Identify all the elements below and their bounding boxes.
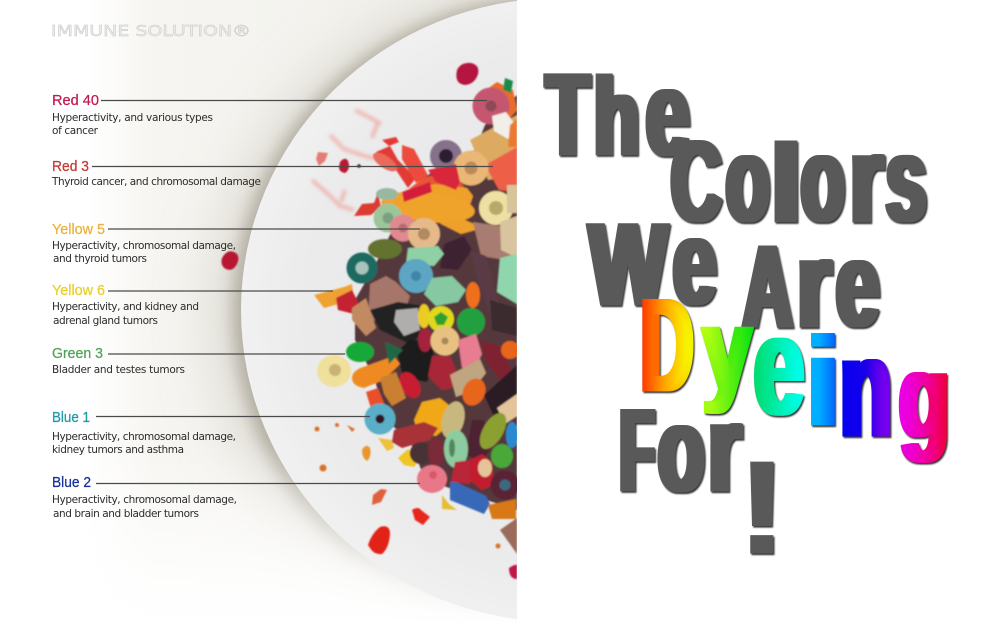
plate	[241, 0, 517, 619]
title word: The: T	[546, 49, 589, 181]
title word: The: h	[594, 55, 639, 179]
title word: For: F	[620, 385, 654, 517]
logo: Immune Solution: IMMUNE SOLUTION®	[51, 22, 251, 40]
title word: Colors: l	[770, 122, 802, 246]
callout: Yellow 5: Hyperactivity, chromosomal damage,	[52, 240, 236, 252]
title mark: exclamation: !	[743, 434, 781, 581]
title word: The: e	[646, 45, 689, 181]
callout: Blue 2	[52, 475, 420, 520]
callout: Green 3	[52, 346, 345, 376]
title word: Dyeing (rainbow): n	[840, 308, 892, 467]
callout: Red 40: of cancer	[52, 125, 99, 137]
callout: Red 3	[51, 159, 493, 188]
callout: Yellow 6: Hyperactivity, and kidney and	[52, 301, 199, 313]
title word: Colors: o	[726, 111, 769, 247]
title word: For	[620, 379, 741, 518]
callout: Red 3: Red 3	[52, 159, 89, 175]
title word: Dyeing (rainbow): g	[899, 329, 949, 463]
title word: We: W	[589, 199, 667, 331]
title word: Dyeing (rainbow): D	[641, 272, 693, 420]
callout: Yellow 6: Yellow 6	[52, 283, 105, 299]
title word: Are: A	[743, 221, 792, 353]
pink ring cereal	[479, 94, 503, 118]
dye splatters	[222, 63, 517, 579]
callout: Red 40: Hyperactivity, and various types	[52, 112, 213, 124]
title word: We: e	[673, 194, 716, 330]
title word: The	[546, 45, 689, 181]
callout: Green 3: Green 3	[52, 346, 103, 362]
callout: Blue 1: Blue 1	[52, 410, 90, 426]
callout: Yellow 5	[52, 222, 420, 265]
title word: For: r	[708, 379, 741, 518]
title word: Are: e	[836, 216, 879, 352]
title word: Are: r	[797, 215, 831, 354]
title word: Dyeing (rainbow): e	[754, 286, 804, 444]
callout: Yellow 6: adrenal gland tumors	[53, 315, 158, 327]
callout: Blue 1: Hyperactivity, chromosomal damage,	[52, 431, 236, 443]
callout: Yellow 5: and thyroid tumors	[53, 253, 147, 265]
callout: Blue 2: Blue 2	[52, 475, 91, 491]
title word: Dyeing (rainbow)	[641, 272, 949, 467]
callout: Green 3: Bladder and testes tumors	[52, 364, 185, 376]
title word: For: o	[658, 381, 704, 517]
callout: Red 40: Red 40	[52, 93, 99, 109]
title word: Dyeing (rainbow): y	[703, 283, 751, 414]
title: The Colors We Are Dyeing For!	[546, 45, 949, 581]
title word: Colors: r	[850, 110, 883, 249]
callout: Yellow 6	[52, 283, 333, 327]
callout: Blue 1	[52, 410, 370, 456]
title word: Colors	[671, 110, 926, 249]
title word: Are	[743, 215, 879, 354]
callout: Red 3: Thyroid cancer, and chromosomal damage	[51, 176, 261, 188]
callout: Red 40	[52, 93, 487, 137]
title word: Colors: o	[801, 111, 844, 247]
callout: Blue 2: and brain and bladder tumors	[53, 508, 199, 520]
photo panel: plate of dyed food	[127, 0, 517, 619]
callout: Blue 2: Hyperactivity, chromosomal damage,	[52, 494, 237, 506]
callout: Blue 1: kidney tumors and asthma	[52, 444, 184, 456]
title word: Colors: C	[671, 118, 721, 246]
callout: Yellow 5: Yellow 5	[52, 222, 105, 238]
title word: Dyeing (rainbow): i	[806, 311, 840, 452]
title word: Colors: s	[886, 111, 926, 247]
food pile	[314, 78, 519, 554]
